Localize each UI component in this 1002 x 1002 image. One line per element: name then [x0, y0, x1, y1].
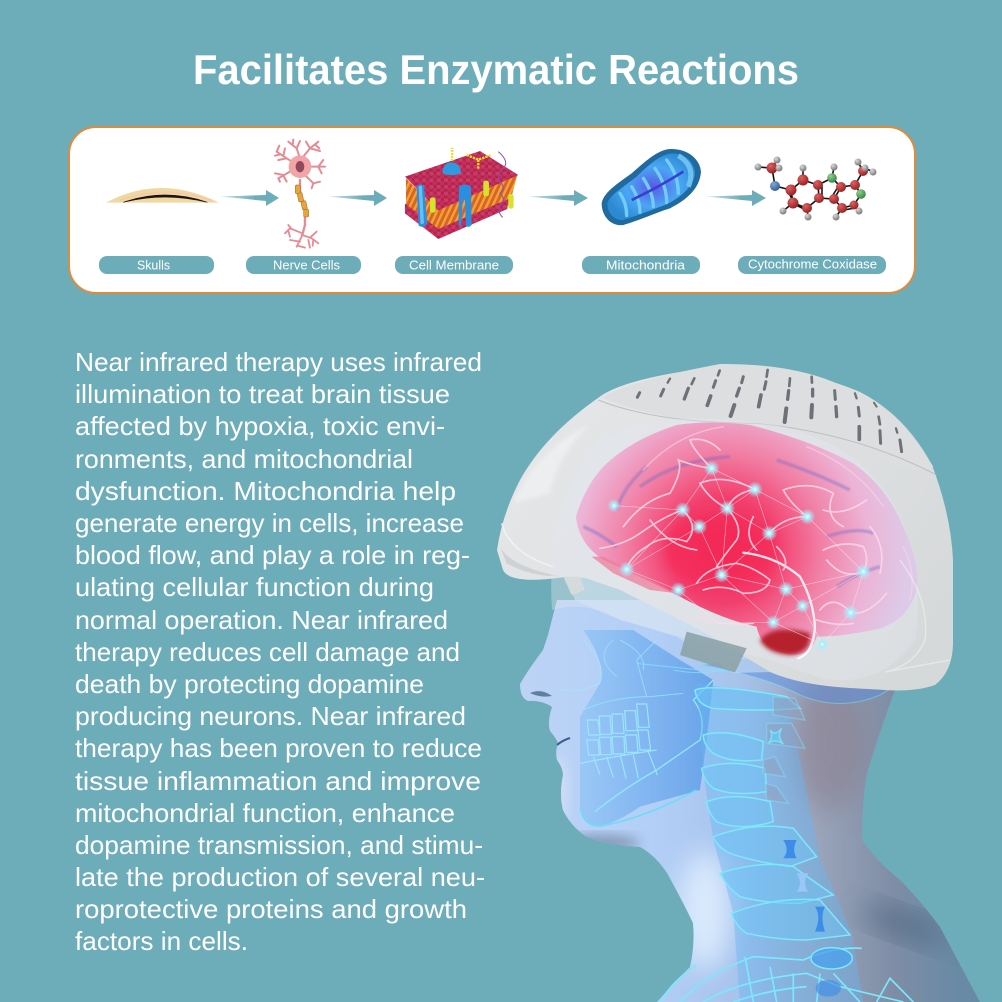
text block: therapy description: dopamine transmission, and stimu-	[75, 830, 483, 860]
arrow: membrane to mitochondria	[528, 190, 588, 206]
text block: therapy description: tissue inflammation and improve	[75, 766, 481, 796]
text block: therapy description: ronments, and mitochondrial	[75, 444, 413, 474]
text block: therapy description: blood flow, and play a role in reg-	[75, 540, 470, 570]
back of skull base	[700, 650, 905, 704]
text block: therapy description: producing neurons. Near infrared	[75, 701, 466, 731]
spine	[660, 683, 913, 1002]
neck shading	[552, 670, 951, 970]
text block: therapy description: therapy has been proven to reduce	[75, 733, 482, 763]
network lines	[614, 468, 863, 644]
text block: therapy description: generate energy in cells, increase	[75, 508, 464, 538]
white gyri	[600, 427, 912, 658]
label: Cytochrome Coxidase: Cytochrome Coxidase	[748, 258, 877, 272]
helmet: translucent lower edge	[565, 577, 770, 673]
text block: therapy description: factors in cells.	[75, 926, 248, 956]
panel background	[69, 127, 915, 293]
label: Mitochondria	[582, 256, 700, 274]
helmet: translucent inner shell	[551, 418, 918, 680]
text block: therapy description: death by protecting dopamine	[75, 669, 424, 699]
helmet rim highlight	[885, 560, 950, 672]
text block: therapy description	[75, 347, 485, 956]
text block: therapy description: mitochondrial function, enhance	[75, 798, 455, 828]
icon: mitochondrion	[602, 149, 701, 225]
helmet shell	[497, 368, 953, 690]
helmet: cap seam and vents	[500, 364, 937, 595]
label: Cytochrome Coxidase	[738, 256, 886, 274]
label: Skulls: Skulls	[137, 258, 170, 272]
text block: therapy description: affected by hypoxia, toxic envi-	[75, 411, 445, 441]
label: Mitochondria: Mitochondria	[606, 258, 685, 272]
head silhouette	[520, 600, 980, 1002]
label: Cell Membrane: Cell Membrane	[409, 258, 499, 272]
icon detail: nostril and mouth	[530, 691, 570, 745]
label: Skulls	[99, 256, 214, 274]
illustration: head with helmet	[497, 364, 980, 1002]
icon: cytochrome molecule	[754, 156, 876, 220]
panel: pathway from skull to cytochrome	[69, 127, 915, 293]
arrow: skull to nerve	[220, 190, 279, 206]
label: Nerve Cells: Nerve Cells	[273, 258, 340, 272]
text block: therapy description: ulating cellular function during	[75, 572, 434, 602]
brain body	[576, 422, 917, 655]
text block: therapy description: dysfunction. Mitochondria help	[75, 476, 456, 506]
arrow: mitochondria to cytochrome	[706, 190, 766, 206]
skull and jaw	[560, 630, 817, 827]
label: Nerve Cells	[246, 256, 361, 274]
text block: therapy description: late the production of several neu-	[75, 862, 485, 892]
text block: therapy description: therapy reduces cell damage and	[75, 637, 460, 667]
arrow: nerve to membrane	[328, 190, 387, 206]
brain deep shading	[583, 457, 880, 655]
brain	[576, 422, 917, 673]
label: Cell Membrane	[395, 256, 513, 274]
icon: cell membrane	[405, 148, 518, 239]
icon: nerve cell	[275, 140, 325, 248]
sensor block	[680, 632, 747, 673]
title: Facilitates Enzymatic Reactions	[193, 46, 799, 93]
text block: therapy description: illumination to treat brain tissue	[75, 379, 450, 409]
glowing nodes	[607, 460, 871, 651]
icon: skull section	[106, 188, 219, 203]
text block: therapy description: roprotective proteins and growth	[75, 894, 467, 924]
text block: therapy description: Near infrared therapy uses infrared	[75, 347, 482, 377]
text block: therapy description: normal operation. Near infrared	[75, 605, 448, 635]
